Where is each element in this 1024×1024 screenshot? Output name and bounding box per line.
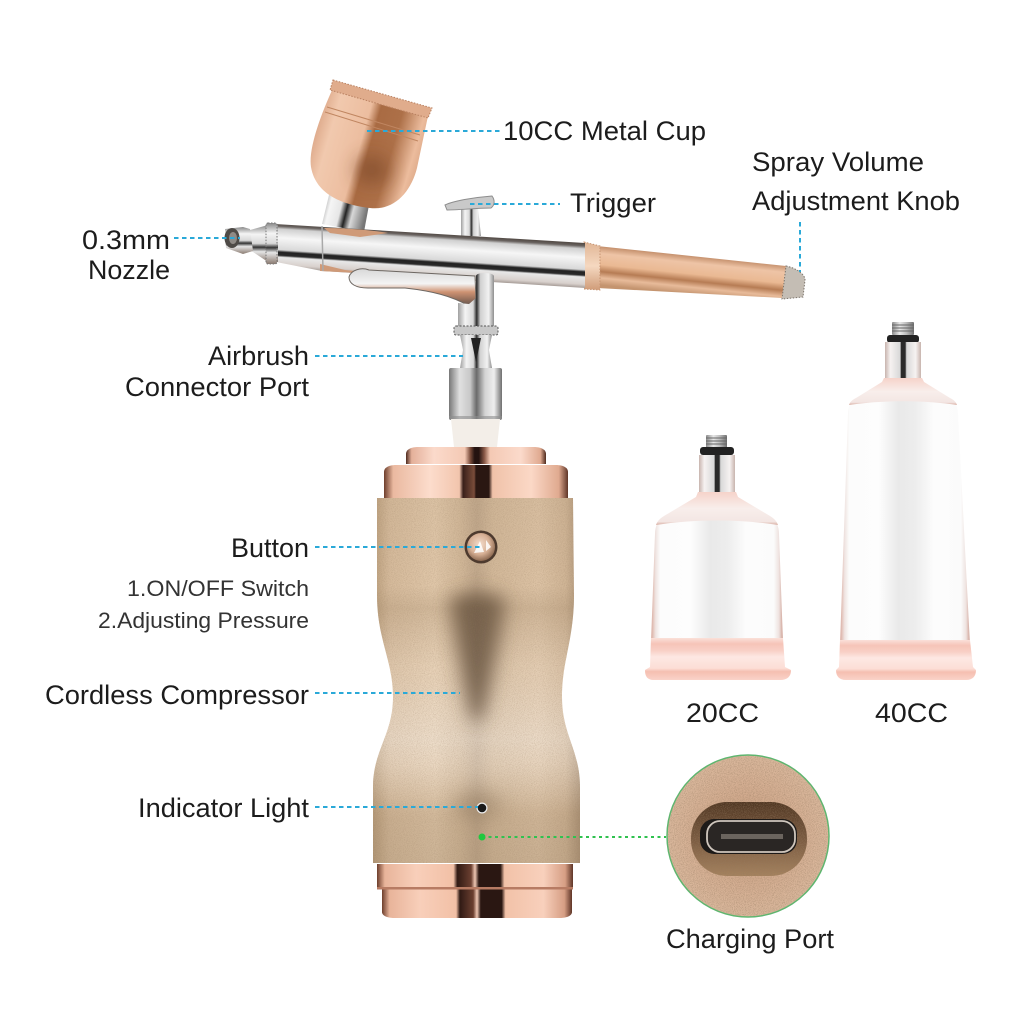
label: Airbrush Connector Port: Connector Port [125, 372, 310, 402]
label: Trigger: Trigger [570, 188, 656, 218]
top caps [384, 447, 568, 499]
callout: green connector to charging port [478, 834, 666, 840]
label: 40CC: 40CC [875, 698, 948, 728]
base [836, 640, 976, 680]
compressor body [370, 498, 585, 864]
label: 10CC Metal Cup: 10CC Metal Cup [503, 116, 706, 146]
bottom rings [377, 864, 573, 918]
neck [885, 342, 921, 379]
label: Indicator Light: Indicator Light [138, 793, 310, 823]
thread [892, 322, 914, 335]
panel: airbrush gun [224, 80, 805, 447]
label: 0.3mm Nozzle: Nozzle [88, 255, 170, 285]
button [464, 530, 498, 564]
icon: handle stem [454, 273, 498, 368]
icon: spray volume knob and tail [584, 242, 805, 299]
icon: 0.3mm nozzle [224, 223, 278, 264]
panel: 20CC bottle [645, 435, 791, 680]
glass body [840, 378, 970, 645]
neck [699, 455, 735, 493]
icon: barrel [275, 224, 585, 288]
indicator light [476, 802, 488, 814]
glass body [651, 492, 783, 642]
text: button functions [98, 576, 309, 633]
label: 0.3mm Nozzle [82, 225, 240, 285]
rubber seal [700, 447, 734, 455]
label: Button: Button [231, 533, 309, 563]
base [645, 638, 791, 680]
label: 0.3mm Nozzle: 0.3mm [82, 225, 170, 255]
label: Spray Volume Adjustment Knob [752, 147, 960, 272]
label: Charging Port: Charging Port [666, 924, 834, 954]
label: Spray Volume Adjustment Knob: Adjustment Knob [752, 186, 960, 216]
shoulder [849, 378, 957, 405]
label: Spray Volume Adjustment Knob: Spray Volume [752, 147, 924, 177]
icon: finger rest [349, 269, 476, 306]
thread [706, 435, 727, 448]
rubber seal [887, 335, 919, 343]
label: Airbrush Connector Port [125, 341, 463, 402]
panel: cordless compressor [370, 447, 585, 918]
label: 20CC: 20CC [686, 698, 759, 728]
panel: 40CC bottle [836, 322, 976, 680]
icon: 10CC metal cup [311, 80, 432, 232]
shoulder [656, 492, 778, 525]
USB-C port [700, 819, 797, 854]
label: Airbrush Connector Port: Airbrush [208, 341, 309, 371]
airbrush connector port [449, 368, 502, 447]
infographic canvas [46, 79, 976, 954]
text: button functions: 2.Adjusting Pressure [98, 608, 309, 633]
panel: charging port inset [667, 755, 829, 917]
text: button functions: 1.ON/OFF Switch [127, 576, 309, 601]
port recess [691, 802, 807, 876]
label: Cordless Compressor: Cordless Compressor [45, 680, 309, 710]
icon: trigger [445, 196, 494, 236]
